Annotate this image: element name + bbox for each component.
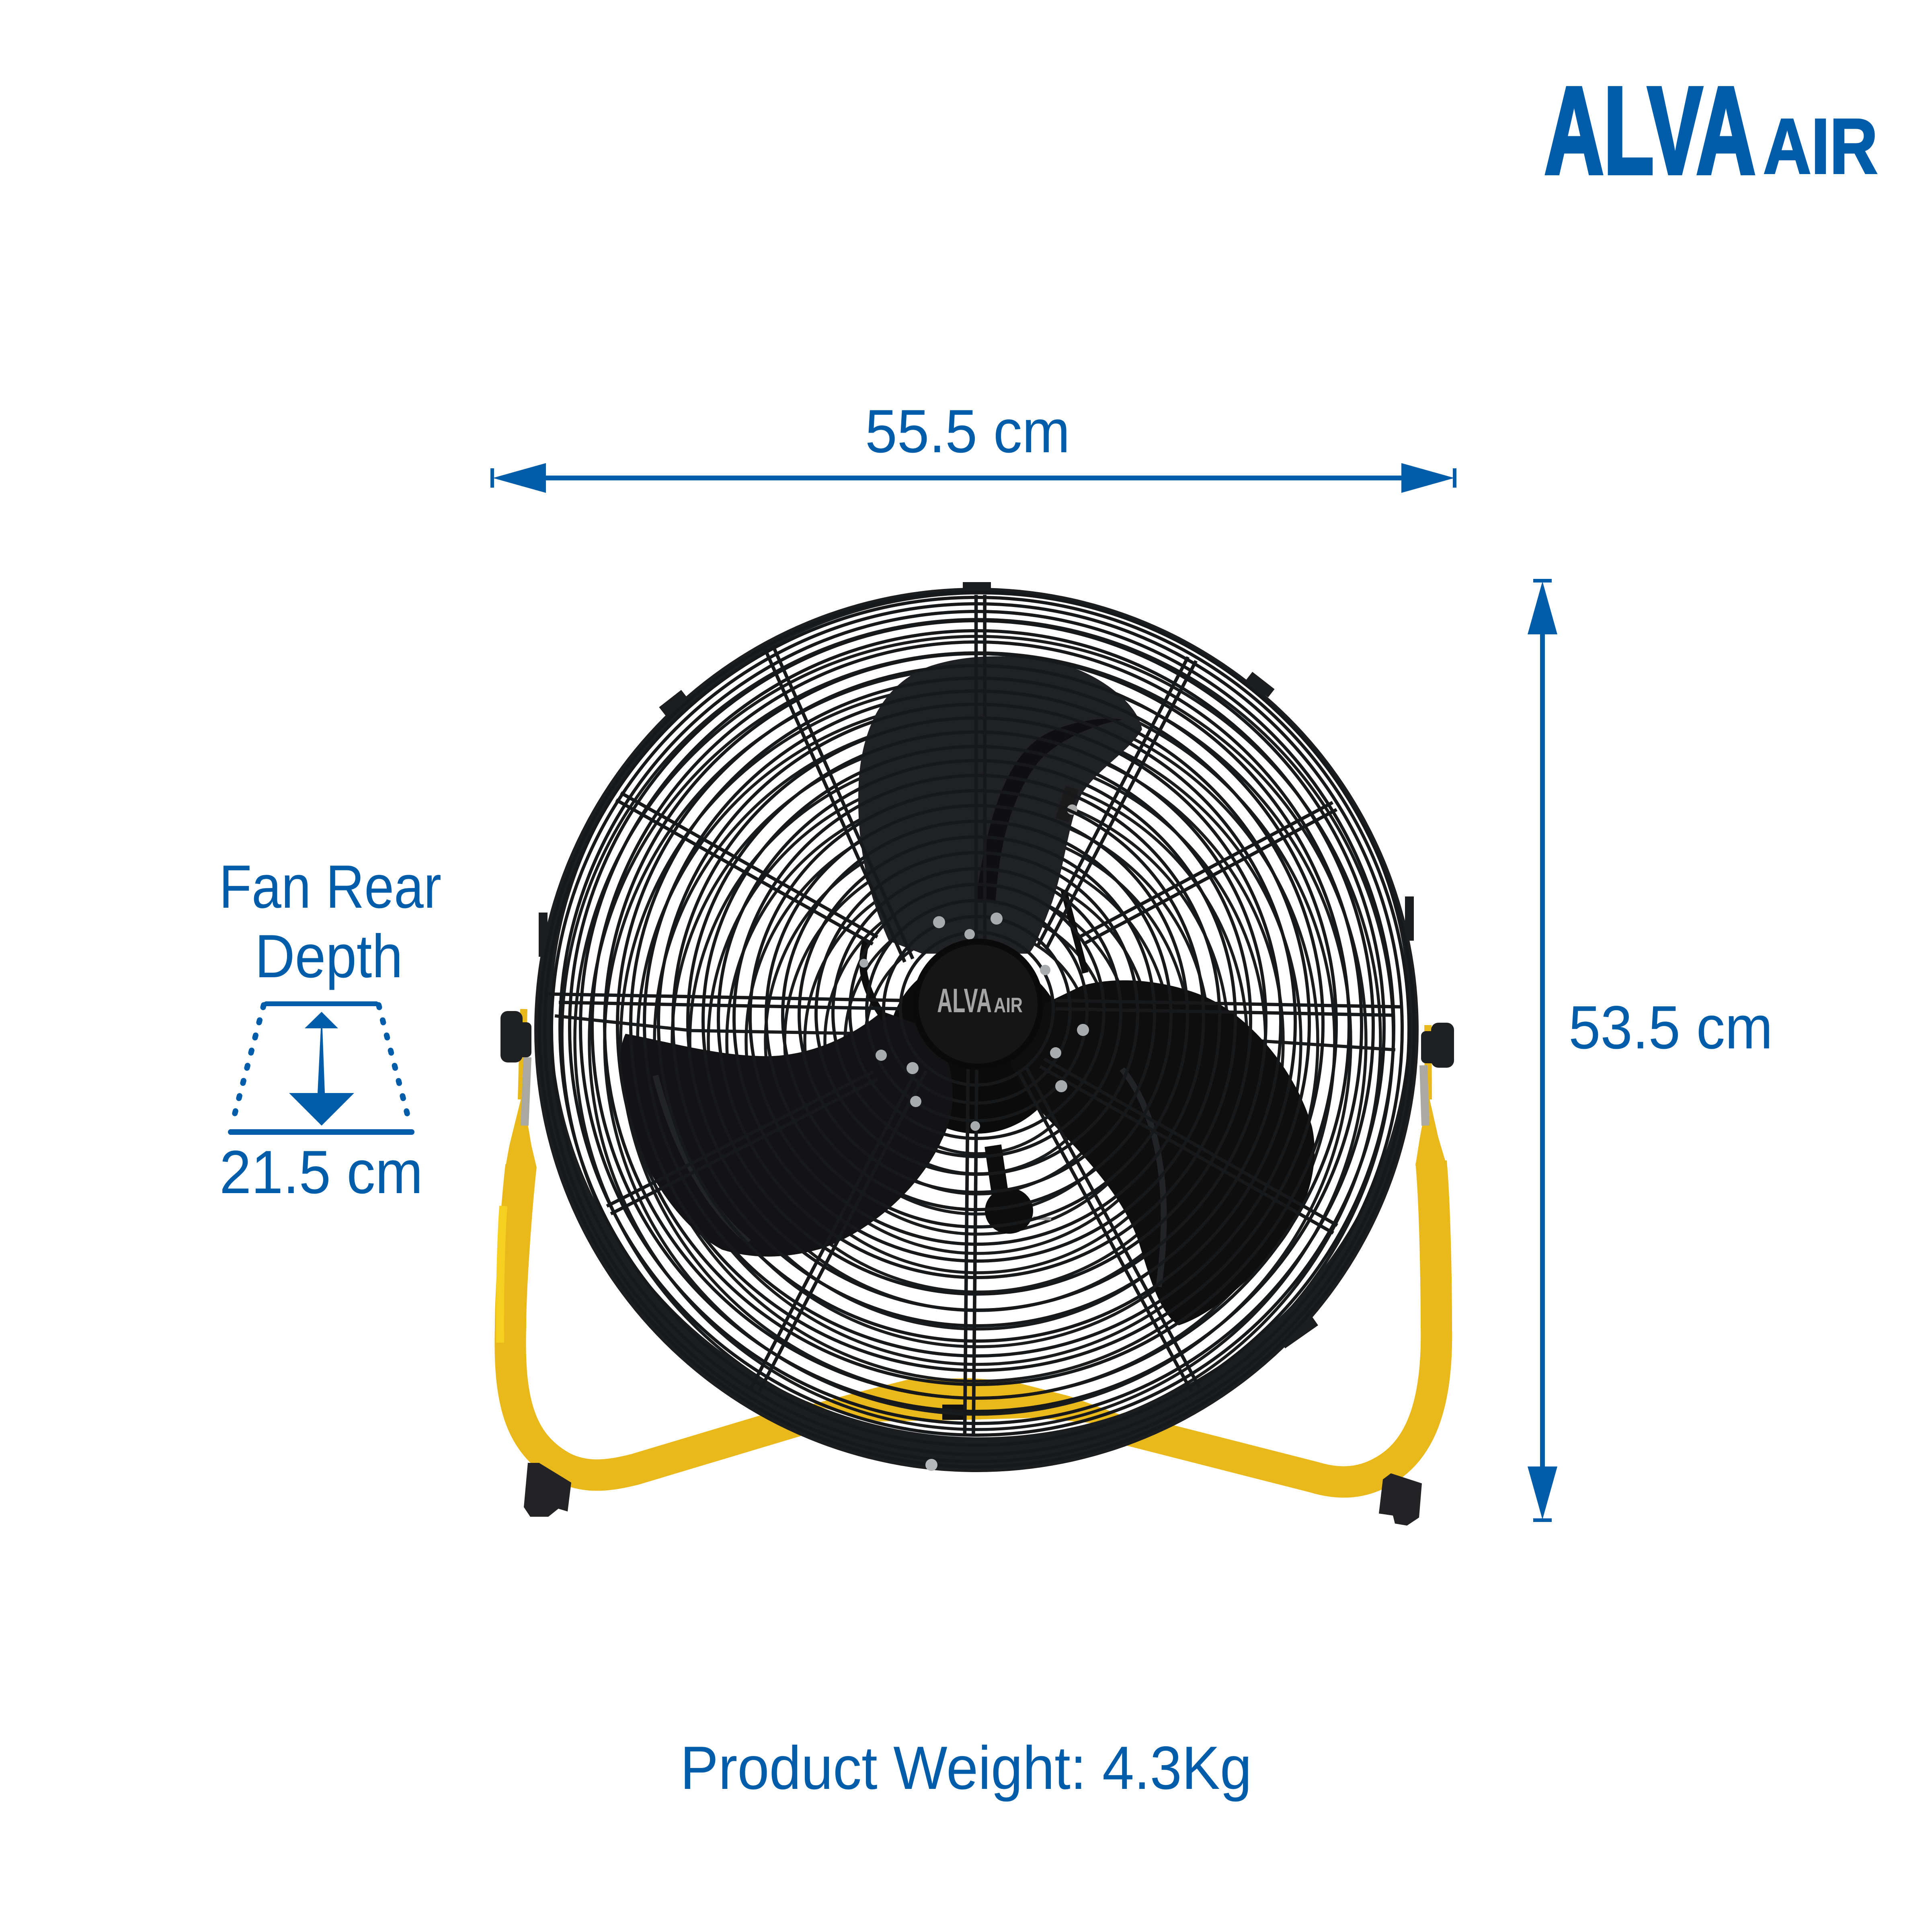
blade: left — [620, 1011, 953, 1257]
blade: top groove — [975, 719, 1122, 902]
depth icon — [228, 1001, 414, 1135]
fan rear depth heading — [219, 853, 441, 991]
front guard radial spokes — [549, 595, 1402, 1434]
width arrow — [490, 463, 1456, 493]
hub cap with logo — [913, 939, 1044, 1070]
fan rim tabs — [539, 582, 1414, 1348]
fan rear depth heading: Depth — [255, 922, 403, 991]
hub cap with logo: ALVA — [937, 982, 992, 1019]
width dimension label: 55.5 cm — [865, 397, 1070, 466]
brand logo: ALVA — [1544, 62, 1756, 200]
blade: right — [1009, 980, 1315, 1325]
hub cap with logo: AIR — [994, 994, 1023, 1017]
rear stand bar seen through guard — [811, 1378, 1120, 1423]
blade: right groove — [1122, 1069, 1164, 1287]
blade: top — [858, 656, 1142, 954]
fan rim — [534, 588, 1419, 1472]
height arrow — [1528, 579, 1557, 1522]
product weight: Product Weight: 4.3Kg — [680, 1734, 1252, 1802]
yellow stand — [500, 1009, 1447, 1482]
stand feet — [524, 1463, 1422, 1526]
front guard concentric wires — [539, 592, 1414, 1467]
rear guard lower horizontal spokes — [555, 1016, 1395, 1050]
blade rivets — [859, 913, 1089, 1131]
rear guard concentric wires — [562, 619, 1393, 1451]
motor body — [888, 957, 1065, 1134]
tilt knobs — [500, 1011, 1454, 1068]
blade: left groove — [656, 1075, 749, 1242]
brand logo: AIR — [1763, 103, 1878, 190]
fan blades — [620, 656, 1315, 1325]
fan guard interior — [552, 595, 1409, 1437]
power cord and plug — [863, 788, 1085, 1234]
depth value: 21.5 cm — [219, 1138, 423, 1206]
rim screw — [925, 1459, 937, 1471]
fan rear depth heading: Fan Rear — [219, 853, 441, 921]
height dimension label: 53.5 cm — [1569, 993, 1773, 1062]
